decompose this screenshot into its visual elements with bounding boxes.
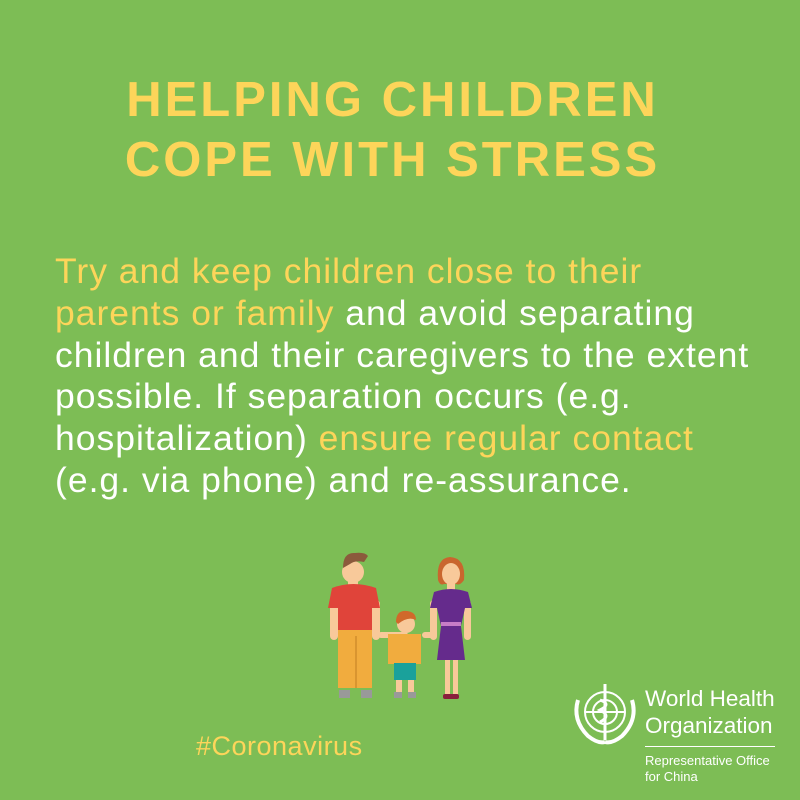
title: COPE WITH STRESS [125, 133, 660, 187]
body text: parents or family and avoid separating [55, 293, 695, 333]
office text: for China [645, 769, 698, 784]
title [125, 73, 660, 187]
org name [645, 686, 775, 738]
body text: possible. If separation occurs (e.g. [55, 376, 632, 416]
org name: World Health [645, 686, 775, 711]
WHO logo [574, 684, 775, 784]
body text [55, 251, 749, 500]
office text [645, 753, 770, 784]
illustration: family [328, 552, 472, 699]
body text: (e.g. via phone) and re-assurance. [55, 460, 632, 500]
body text: children and their caregivers to the extent [55, 335, 749, 375]
body text: Try and keep children close to their [55, 251, 642, 291]
mother [430, 557, 472, 699]
title: HELPING CHILDREN [126, 73, 659, 127]
child [378, 611, 436, 698]
father [328, 553, 380, 698]
org name: Organization [645, 713, 773, 738]
body text: hospitalization) ensure regular contact [55, 418, 694, 458]
office text: Representative Office [645, 753, 770, 768]
icon: WHO emblem [574, 684, 636, 744]
hashtag: #Coronavirus [196, 731, 363, 761]
